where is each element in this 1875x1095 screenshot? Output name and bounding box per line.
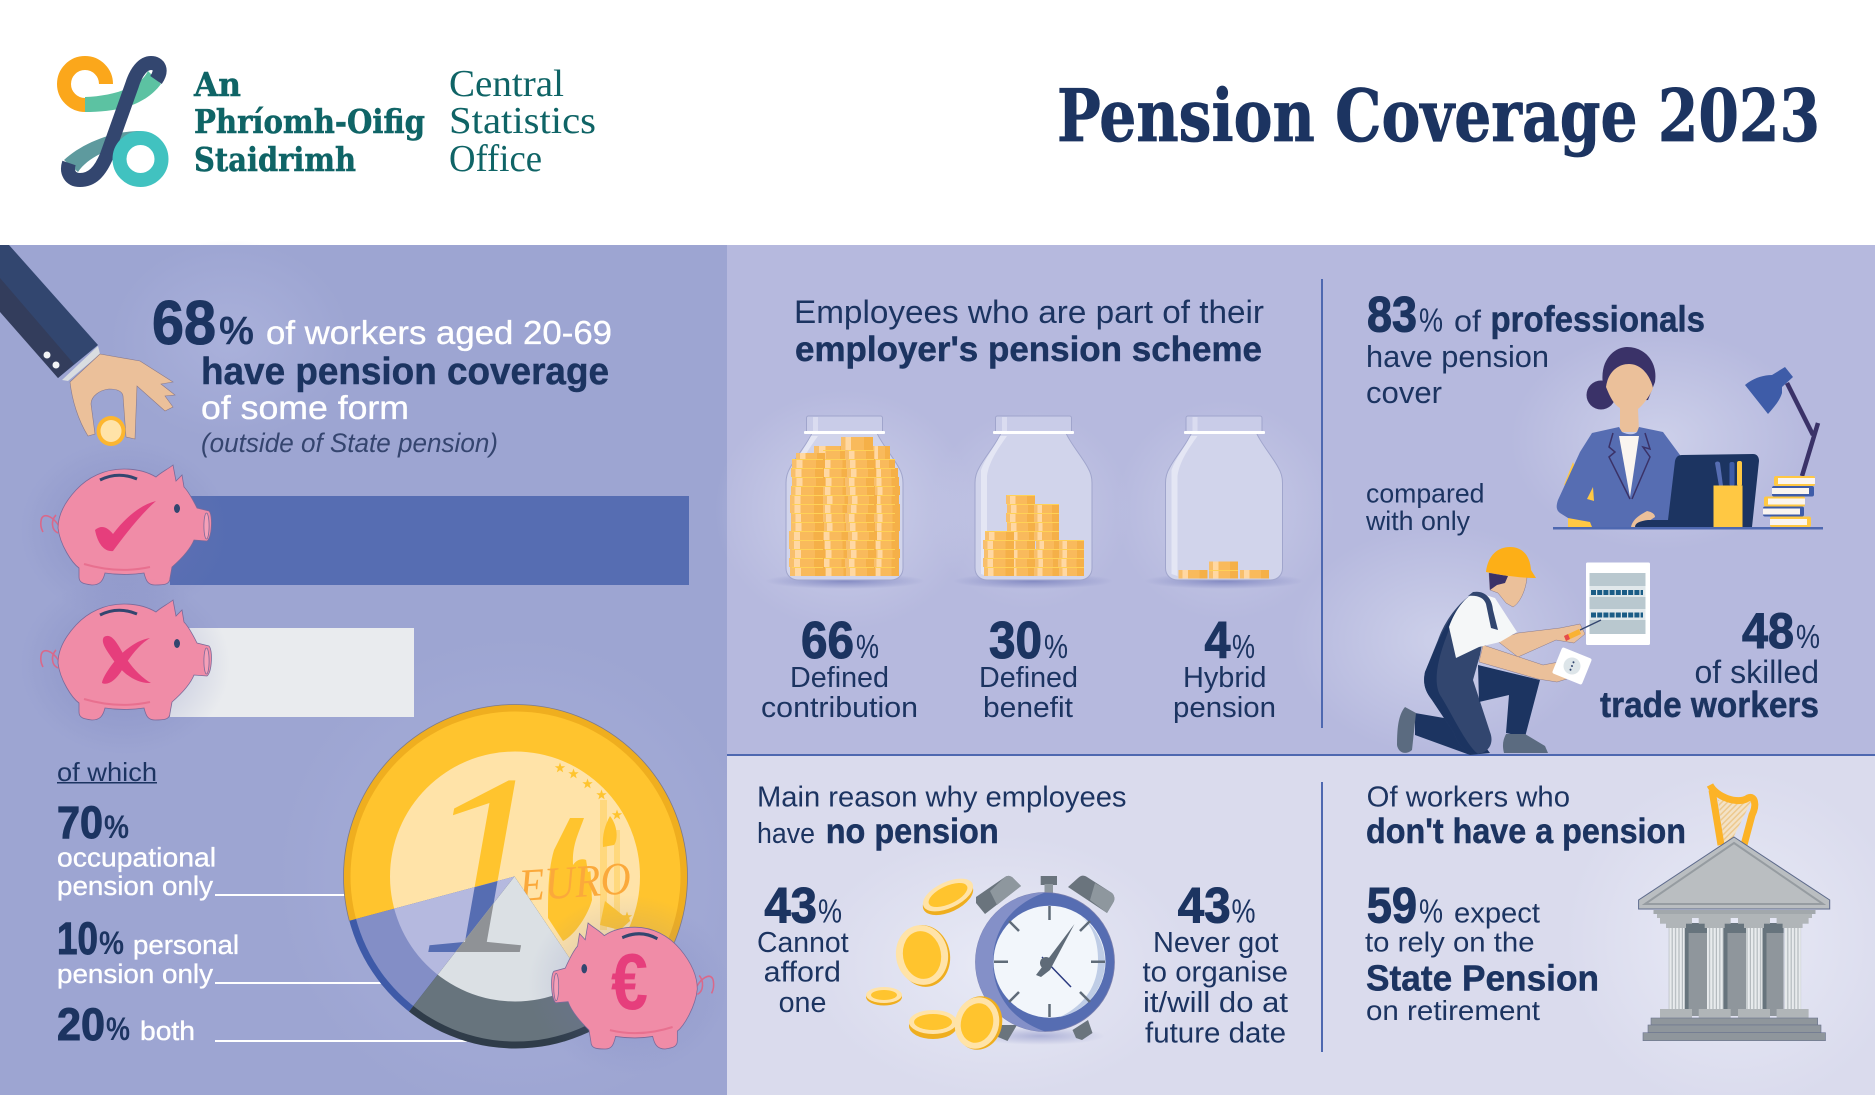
pie slice: occupational 70%: EURO <box>516 852 632 911</box>
headline: 68% of workers: 68 <box>152 289 216 358</box>
pie slice: personal 10%: 1 <box>419 721 549 1009</box>
arms <box>1496 624 1585 657</box>
illustration: professional woman at desk <box>1553 347 1823 530</box>
coins <box>789 437 900 576</box>
heading: workers without a pension <box>1366 782 1686 851</box>
hair and bun <box>1586 380 1616 410</box>
gold gap <box>1587 487 1594 501</box>
heading: workers without a pension: Of workers who <box>1367 782 1570 814</box>
logo text: English: Office <box>449 138 542 180</box>
helmet <box>1486 547 1536 578</box>
headline: 68% of workers: of some form <box>201 389 409 426</box>
chair <box>1564 462 1582 485</box>
logo text: Irish <box>193 65 425 179</box>
bar: without pension 32% <box>170 628 414 717</box>
logo text: Irish: An <box>193 65 241 104</box>
section: employer pension scheme heading: Employees who are part of their <box>794 294 1264 330</box>
stat: 70% occupational <box>57 797 216 901</box>
stat: 48% of skilled trade workers: trade workers <box>1600 684 1819 725</box>
heading: workers without a pension: don't have a pension <box>1366 812 1686 851</box>
stat: 83% of professionals: have pension <box>1366 339 1549 374</box>
stat: 43% cannot afford one <box>757 878 849 1019</box>
harp <box>1710 785 1755 845</box>
back wall <box>1685 925 1784 1016</box>
column 1 <box>789 453 825 576</box>
stat: 66% defined contribution: Defined <box>790 662 889 694</box>
stat: 66% defined contribution <box>761 612 918 724</box>
bells and feet <box>976 876 1021 914</box>
stat: 4% hybrid pension: % <box>1232 628 1255 665</box>
stat: 83% of professionals: 83 <box>1367 286 1417 342</box>
heading: main reason no pension: have <box>757 818 815 850</box>
stat: 43% never got to organise: % <box>1232 893 1256 930</box>
stat: 43% cannot afford one: afford <box>764 957 841 989</box>
jar: defined benefit <box>953 416 1113 589</box>
bar: with pension 68% <box>170 496 689 585</box>
panel: right top <box>715 245 1875 755</box>
heading: main reason no pension: Main reason why employees <box>757 782 1126 814</box>
icon: hand dropping coin <box>0 245 175 446</box>
columns <box>1669 928 1685 1009</box>
icon: piggy bank euro <box>528 895 728 1075</box>
stat: 66% defined contribution: contribution <box>761 692 918 724</box>
fuse panel <box>1586 562 1650 645</box>
stat: 10% personal <box>57 913 239 989</box>
stat: 4% hybrid pension: pension <box>1173 692 1276 724</box>
stat: 59% state pension: on retirement <box>1366 995 1540 1026</box>
stat: 83% of professionals: % <box>1419 302 1443 338</box>
panel: right bottom <box>727 755 1875 1095</box>
stat: 4% hybrid pension: Hybrid <box>1183 662 1266 694</box>
clock hands <box>1042 957 1071 987</box>
laptop <box>1635 454 1759 527</box>
icon: alarm clock with coins <box>866 872 1114 1055</box>
icon: piggy bank euro: € <box>611 937 648 1026</box>
lamp <box>1787 383 1818 476</box>
headline: 68% of workers <box>152 289 612 458</box>
icon: government building with harp <box>1639 785 1830 1041</box>
stat: 43% never got to organise: Never got <box>1153 927 1278 959</box>
stat: 30% defined benefit: 30 <box>989 612 1042 670</box>
stat: 4% hybrid pension: 4 <box>1204 612 1231 670</box>
stat: 43% cannot afford one: 43 <box>764 878 817 934</box>
stat: 59% state pension: expect <box>1454 898 1540 930</box>
stat: 59% state pension <box>1365 878 1599 1026</box>
socket <box>1552 647 1592 685</box>
stat: 4% hybrid pension <box>1173 612 1276 724</box>
stat: 48% of skilled trade workers: % <box>1796 618 1820 655</box>
stat: 70% occupational: 70 <box>57 797 103 848</box>
face and neck <box>1606 364 1653 432</box>
logo text: English: Central <box>449 63 564 105</box>
stat: 59% state pension: State Pension <box>1366 958 1599 999</box>
coins <box>1178 562 1269 578</box>
stat: 10% personal: 10 <box>57 913 98 964</box>
stat: 10% personal: % <box>99 925 124 961</box>
headline: 68% of workers: of workers aged 20-69 <box>266 314 612 351</box>
boots <box>1397 707 1416 753</box>
stat: 59% state pension: 59 <box>1367 878 1417 934</box>
stat: 66% defined contribution: 66 <box>801 612 854 670</box>
back leg <box>1415 713 1490 755</box>
logo text: Irish: Staidrimh <box>194 140 356 179</box>
breakdown text <box>57 757 239 1050</box>
headline: 68% of workers: % <box>219 309 254 353</box>
stat: 43% never got to organise: future date <box>1145 1017 1286 1049</box>
breakdown text: of which <box>57 757 157 787</box>
column 2 <box>814 446 853 576</box>
panel: left coverage <box>0 240 756 1095</box>
column 3 <box>841 437 877 576</box>
headline: 68% of workers: (outside of State pension) <box>201 428 498 458</box>
steps <box>1651 1018 1818 1025</box>
pediment <box>1639 837 1830 909</box>
section: employer pension scheme heading: employer's pension scheme <box>795 330 1262 369</box>
clock body <box>976 892 1114 1032</box>
text: compared with only: with only <box>1365 506 1470 536</box>
stat: 83% of professionals: of <box>1454 304 1481 338</box>
heading: main reason no pension <box>757 782 1126 851</box>
hand <box>1631 511 1655 527</box>
logo text: English <box>449 63 596 180</box>
pie slice: both 20% <box>409 876 589 1048</box>
chart: euro coin pie <box>344 704 688 1048</box>
stat: 70% occupational: % <box>104 809 129 845</box>
stat: 43% never got to organise: it/will do at <box>1143 987 1288 1019</box>
stat: 30% defined benefit <box>979 612 1078 724</box>
stat: 30% defined benefit: % <box>1044 628 1068 665</box>
pen holder <box>1714 486 1742 527</box>
stat: 83% of professionals <box>1366 286 1705 410</box>
stat: 66% defined contribution: % <box>856 628 879 665</box>
stat: 43% cannot afford one: Cannot <box>757 927 849 959</box>
stat: 20% both: % <box>106 1011 130 1047</box>
pie slice: both 20%: 1 <box>419 721 549 1009</box>
screwdriver <box>1580 620 1601 630</box>
jar: hybrid pension <box>1144 416 1304 589</box>
stat: 20% both: both <box>140 1016 195 1046</box>
stat: 10% personal: pension only <box>57 959 214 989</box>
neck and face <box>1489 573 1527 607</box>
pie slice: personal 10% <box>349 876 514 1012</box>
coins <box>983 495 1084 576</box>
section: employer pension scheme heading <box>794 294 1264 369</box>
logo mark <box>64 63 162 180</box>
shirt <box>1619 436 1639 497</box>
text: compared with only: compared <box>1366 478 1484 508</box>
stat: 30% defined benefit: Defined <box>979 662 1078 694</box>
stat: 20% both: 20 <box>57 999 105 1050</box>
desk <box>1553 527 1823 530</box>
flying coins <box>866 872 1008 1055</box>
stat: 70% occupational: pension only <box>57 871 214 901</box>
stat: 43% cannot afford one: % <box>818 893 842 930</box>
pie slice: occupational 70% <box>343 704 688 958</box>
clock dial <box>994 906 1106 1018</box>
logo text: Irish: Phríomh-Oifig <box>194 102 425 141</box>
jacket <box>1557 427 1680 527</box>
stat: 30% defined benefit: benefit <box>983 692 1073 724</box>
entablature <box>1654 910 1816 914</box>
books <box>1763 476 1815 527</box>
stat: 20% both <box>57 999 195 1050</box>
stat: 83% of professionals: professionals <box>1490 298 1705 340</box>
stat: 10% personal: personal <box>133 930 239 960</box>
icon: piggy bank cross <box>20 575 230 755</box>
stat: 48% of skilled trade workers <box>1600 603 1820 725</box>
clock shadow <box>975 1027 1105 1045</box>
pie slice: occupational 70%: 1 <box>419 721 549 1009</box>
illustration: skilled trade worker <box>1397 547 1650 755</box>
stat: 43% never got to organise <box>1142 878 1288 1049</box>
stat: 48% of skilled trade workers: of skilled <box>1694 654 1819 690</box>
overalls <box>1424 592 1492 754</box>
stat: 70% occupational: occupational <box>57 842 216 872</box>
icon: piggy bank tick <box>20 440 230 620</box>
capitals and bases <box>1660 918 1809 1018</box>
stat: 59% state pension: to rely on the <box>1365 927 1534 958</box>
logo text: English: Statistics <box>449 100 596 142</box>
stat: 59% state pension: % <box>1419 893 1443 930</box>
text: compared with only <box>1365 478 1484 536</box>
stat: 83% of professionals: cover <box>1366 375 1442 410</box>
thigh <box>1478 665 1540 737</box>
clock ticks <box>994 906 1105 1017</box>
jar: defined contribution <box>765 416 925 589</box>
stat: 43% never got to organise: 43 <box>1178 878 1231 934</box>
header background <box>0 0 1875 245</box>
stat: 48% of skilled trade workers: 48 <box>1742 603 1794 659</box>
heading: main reason no pension: no pension <box>826 812 999 851</box>
headline: 68% of workers: have pension coverage <box>201 351 609 393</box>
t-shirt <box>1449 592 1517 658</box>
stat: 43% never got to organise: to organise <box>1142 957 1288 989</box>
logo <box>64 63 596 180</box>
stat: 43% cannot afford one: one <box>779 987 826 1019</box>
pens <box>1715 462 1723 486</box>
column 4 <box>872 446 900 576</box>
